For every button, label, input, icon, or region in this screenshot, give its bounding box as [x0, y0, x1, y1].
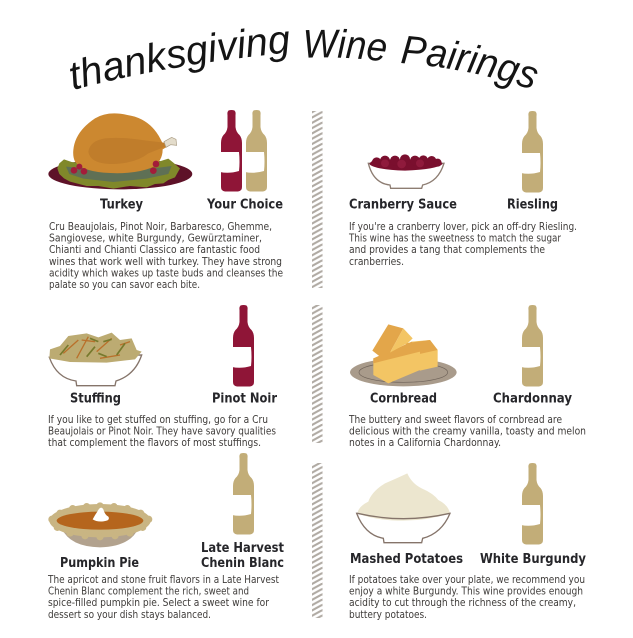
icon: roast turkey on platter — [48, 113, 192, 189]
heading: Chardonnay: Chardonnay — [493, 392, 572, 406]
text: mashed potatoes pairing: acidity to cut through the richness of the creamy, — [349, 598, 576, 609]
icon: cranberry bowl — [368, 154, 444, 188]
heading: Your Choice: Your Choice — [206, 198, 283, 212]
text: mashed potatoes pairing: enjoy a white Burgundy. This wine provides enough — [349, 586, 583, 598]
text: stuffing pairing: that complement the flavors of most stuffings. — [48, 438, 261, 449]
icon: pumpkin pie — [48, 502, 152, 547]
title — [70, 28, 538, 90]
heading: Pinot Noir: Pinot Noir — [212, 392, 278, 406]
heading: Stuffing: Stuffing — [70, 392, 121, 406]
text: pumpkin pie pairing — [47, 575, 279, 621]
heading: Turkey: Turkey — [100, 198, 143, 212]
heading: Late Harvest Chenin Blanc — [201, 541, 284, 571]
divider: top — [312, 111, 322, 288]
icon: white wine bottle — [521, 111, 543, 192]
heading: Late Harvest Chenin Blanc: Late Harvest — [201, 541, 284, 556]
heading: Riesling: Riesling — [507, 198, 558, 212]
text: cranberry pairing — [348, 222, 577, 268]
title: Wine — [306, 28, 386, 61]
icon: white wine bottle — [521, 305, 543, 386]
icon: cornbread on plate — [350, 324, 457, 386]
heading: Mashed Potatoes: Mashed Potatoes — [350, 552, 463, 567]
text: turkey pairing: Sangiovese, white Burgundy, Gewürztaminer, — [49, 234, 262, 244]
text: cranberry pairing: If you're a cranberry lover, pick an off-dry Riesling. — [349, 222, 577, 233]
text: mashed potatoes pairing: If potatoes take over your plate, we recommend you — [349, 575, 585, 586]
heading: Late Harvest Chenin Blanc: Chenin Blanc — [201, 556, 284, 571]
text: pumpkin pie pairing: The apricot and stone fruit flavors in a Late Harvest — [47, 575, 279, 586]
divider: bottom — [312, 463, 322, 618]
panel: stuffing — [48, 305, 278, 449]
heading: Cornbread: Cornbread — [370, 392, 437, 406]
divider: middle — [312, 305, 322, 443]
panel: cranberry sauce — [348, 111, 577, 268]
heading: Pumpkin Pie: Pumpkin Pie — [60, 556, 139, 571]
text: cranberry pairing: and provides a tang that complements the — [349, 245, 545, 256]
heading: White Burgundy: White Burgundy — [480, 552, 586, 567]
heading: Cranberry Sauce: Cranberry Sauce — [349, 198, 457, 212]
text: cornbread pairing: The buttery and sweet flavors of cornbread are — [348, 415, 562, 426]
title: Pairings — [401, 36, 538, 89]
icon: red wine bottle — [220, 110, 242, 192]
panel: turkey — [48, 110, 283, 291]
text: stuffing pairing: Beaujolais or Pinot Noir. They have savory qualities — [48, 426, 276, 438]
text: cranberry pairing: This wine has the sweetness to match the sugar — [348, 234, 562, 244]
icon: white wine bottle — [232, 453, 254, 534]
text: cornbread pairing: notes in a California Chardonnay. — [349, 438, 501, 449]
text: turkey pairing — [49, 222, 283, 291]
title: thanksgiving — [70, 28, 289, 90]
text: mashed potatoes pairing — [349, 575, 585, 621]
text: pumpkin pie pairing: Chenin Blanc complement the rich, sweet and — [48, 586, 249, 598]
text: pumpkin pie pairing: dessert so your dish stays balanced. — [48, 610, 211, 621]
text: turkey pairing: Chianti and Chianti Classico are fantastic food — [49, 245, 260, 256]
text: stuffing pairing — [48, 415, 276, 449]
text: stuffing pairing: If you like to get stuffed on stuffing, go for a Cru — [48, 415, 268, 426]
panel: pumpkin pie — [47, 453, 284, 621]
text: pumpkin pie pairing: spice-filled pumpkin pie. Select a sweet wine for — [48, 598, 270, 609]
panel: cornbread — [348, 305, 586, 449]
icon: white wine bottle — [521, 463, 543, 544]
icon: mashed potato bowl — [357, 473, 450, 543]
text: cornbread pairing: delicious with the creamy vanilla, toasty and melon — [349, 426, 586, 438]
text: turkey pairing: wines that work well with turkey. They have strong — [49, 257, 282, 268]
icon: stuffing bowl — [49, 333, 142, 386]
icon: white wine bottle — [245, 110, 267, 192]
text: turkey pairing: acidity which wakes up taste buds and cleanses the — [49, 268, 283, 280]
text: turkey pairing: palate so you can savor each bite. — [49, 280, 200, 291]
panel: mashed potatoes — [349, 463, 586, 621]
text: cornbread pairing — [348, 415, 586, 449]
text: turkey pairing: Cru Beaujolais, Pinot Noir, Barbaresco, Ghemme, — [49, 222, 272, 233]
icon: red wine bottle — [232, 305, 254, 386]
text: cranberry pairing: cranberries. — [349, 257, 404, 268]
text: mashed potatoes pairing: buttery potatoes. — [349, 610, 427, 621]
